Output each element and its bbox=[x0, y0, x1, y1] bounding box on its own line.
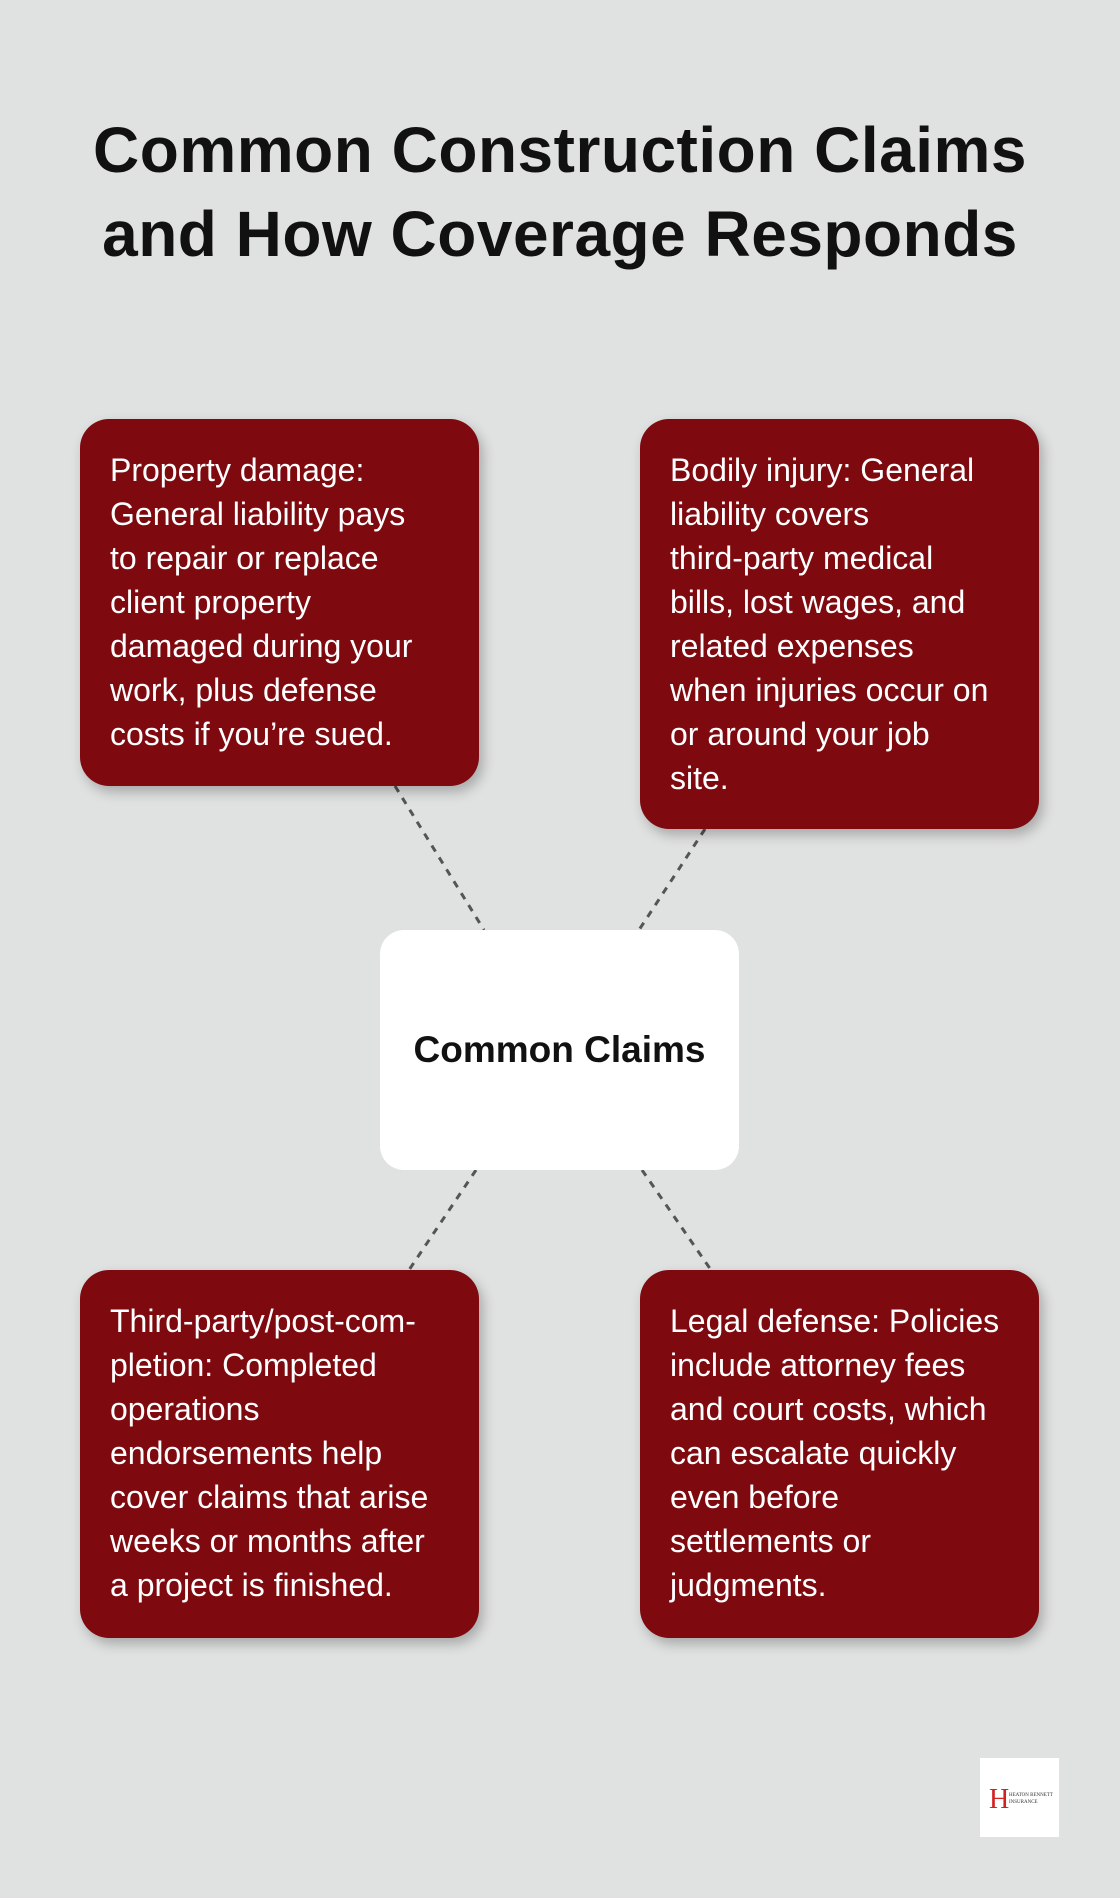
panel: bodily injury: or around your job bbox=[670, 716, 930, 752]
panel: property damage: Property damage: bbox=[110, 452, 364, 488]
panel: property damage bbox=[80, 419, 479, 786]
panel: legal defense: even before bbox=[670, 1479, 839, 1515]
panel: post-completion: endorsements help bbox=[110, 1435, 382, 1471]
panel: property damage: costs if you’re sued. bbox=[110, 716, 393, 752]
panel: property damage: to repair or replace bbox=[110, 540, 379, 576]
panel: legal defense bbox=[640, 1270, 1039, 1638]
logo: H bbox=[989, 1784, 1009, 1815]
panel: bodily injury: when injuries occur on bbox=[670, 672, 988, 708]
title bbox=[93, 114, 1027, 270]
panel: bodily injury: bills, lost wages, and bbox=[670, 584, 965, 620]
panel: bodily injury: third-party medical bbox=[670, 540, 933, 576]
panel: post-completion: weeks or months after bbox=[110, 1523, 425, 1559]
panel: legal defense: include attorney fees bbox=[670, 1347, 965, 1383]
panel: post-completion: Third-party/post-com- bbox=[110, 1303, 416, 1339]
panel: property damage: client property bbox=[110, 584, 311, 620]
panel: post-completion: pletion: Completed bbox=[110, 1347, 377, 1383]
title: Common Construction Claims bbox=[93, 114, 1027, 186]
logo: HEATON BENNETT bbox=[1009, 1793, 1053, 1798]
panel: bodily injury: site. bbox=[670, 760, 729, 796]
panel: property damage: General liability pays bbox=[110, 496, 405, 532]
center node: Common Claims bbox=[414, 1029, 705, 1070]
panel: legal defense: can escalate quickly bbox=[670, 1435, 956, 1471]
center node bbox=[380, 930, 739, 1170]
panel: bodily injury: liability covers bbox=[670, 496, 869, 532]
panel: bodily injury bbox=[640, 419, 1039, 829]
panel: bodily injury: Bodily injury: General bbox=[670, 452, 974, 488]
panel: property damage: damaged during your bbox=[110, 628, 412, 664]
logo: INSURANCE bbox=[1009, 1800, 1038, 1805]
title: and How Coverage Responds bbox=[102, 198, 1018, 270]
logo bbox=[980, 1758, 1059, 1837]
panel: legal defense: settlements or bbox=[670, 1523, 871, 1559]
panel: legal defense: judgments. bbox=[670, 1567, 827, 1603]
panel: post-completion bbox=[80, 1270, 479, 1638]
panel: post-completion: a project is finished. bbox=[110, 1567, 393, 1603]
panel: legal defense: and court costs, which bbox=[670, 1391, 987, 1427]
panel: bodily injury: related expenses bbox=[670, 628, 914, 664]
panel: post-completion: cover claims that arise bbox=[110, 1479, 428, 1515]
panel: post-completion: operations bbox=[110, 1391, 259, 1427]
panel: property damage: work, plus defense bbox=[110, 672, 377, 708]
panel: legal defense: Legal defense: Policies bbox=[670, 1303, 999, 1339]
